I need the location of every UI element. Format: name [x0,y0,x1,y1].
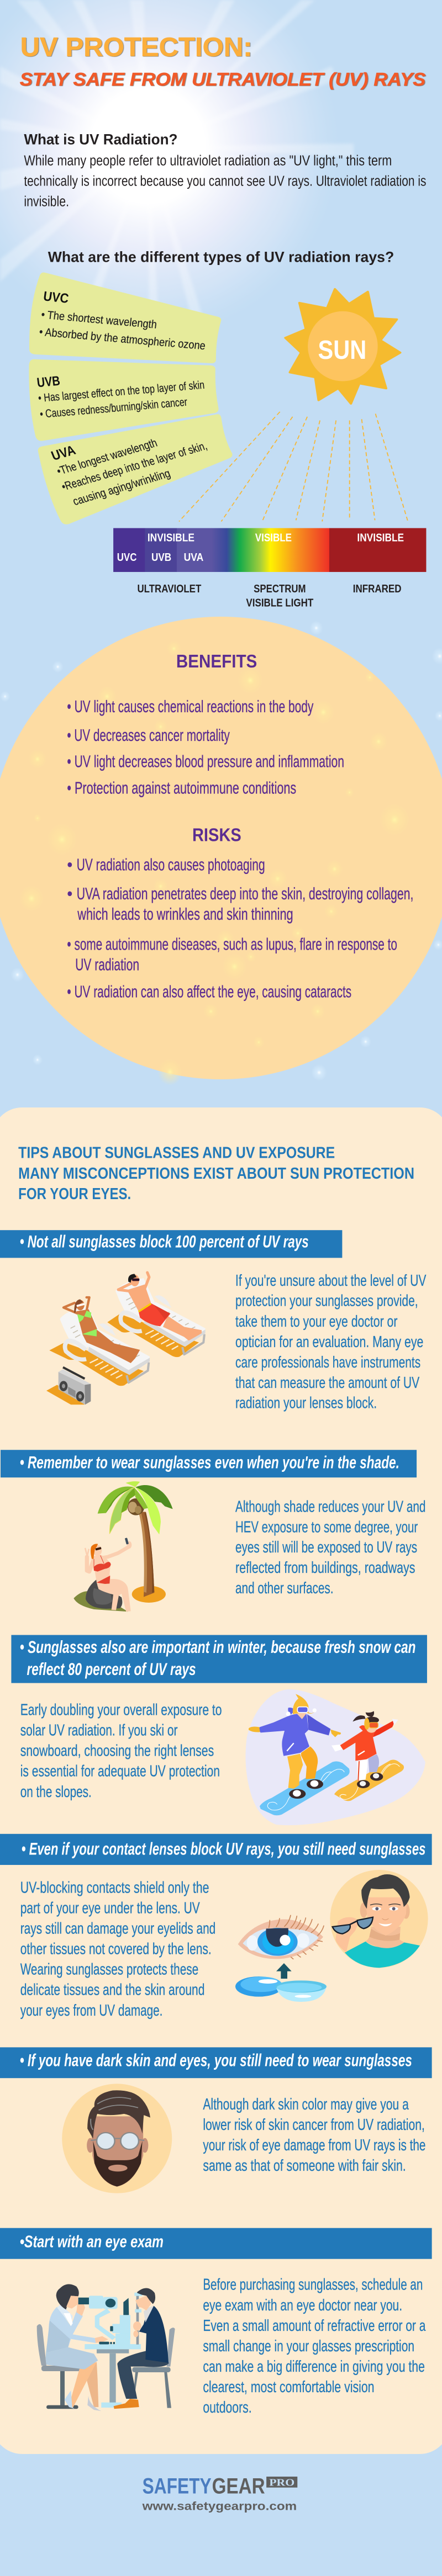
illustration: eye, contact lenses and man with sunglasses [235,1870,428,2002]
text: tip 4 body: delicate tissues and the skin around [20,1981,204,1999]
text: tip 5 body [203,2096,425,2175]
section: benefits and risks text [0,621,442,1085]
tip bar: winter: reflect 80 percent of UV rays [27,1660,196,1679]
chart: electromagnetic spectrum bar: UVB [151,550,171,564]
intro text block: What is UV Radiation? [24,131,177,148]
list: risks: UV radiation [75,956,139,974]
list: benefits [67,698,344,798]
chart: electromagnetic spectrum bar: VISIBLE [255,531,292,544]
tip bar: shade [1,1450,417,1477]
tip bar: not all sunglasses [0,1230,342,1258]
section: tips heading and tip 1 [0,1144,427,1412]
spectrum labels: ULTRAVIOLET [137,582,201,595]
panel: UVA [38,414,233,524]
tip bar: contact lenses [0,1834,432,1865]
background blob [245,1689,425,1825]
boarder 2 [332,1711,398,1788]
list: risks [67,856,413,1001]
list: risks: • [67,856,72,874]
sparkles over circle [19,641,410,1085]
list: benefits: • Protection against autoimmune conditions [67,780,296,798]
panel: UVB [29,359,219,441]
rock [86,1579,122,1609]
man sunbathing [118,1273,202,1340]
text: tip 1 body [235,1271,427,1412]
panel: UVB: • Has largest effect on the top layer of skin [38,378,205,405]
spectrum labels: VISIBLE LIGHT [246,596,313,609]
logo: Safety Gear Pro: GEAR [212,2473,265,2498]
logo: Safety Gear Pro: PRO [269,2477,294,2488]
heading: tips [18,1144,414,1202]
chart: electromagnetic spectrum bar [113,528,426,572]
towel slat gaps [90,1331,178,1378]
section: UV ray types [29,249,426,609]
title: UV PROTECTION: [20,32,252,62]
towels [46,1314,199,1404]
illustration: woman under palm tree [73,1481,173,1612]
icon: sun [285,289,400,404]
list: risks: which leads to wrinkles and skin thinning [77,905,293,924]
text: tip 3 body [20,1701,222,1800]
icon: sun: SUN [318,335,366,364]
panel: UVB: UVB [36,374,61,390]
text: tip 3 body: solar UV radiation. If you ski or [20,1721,177,1739]
panel: UVC: • Absorbed by the atmospheric ozone [39,325,206,352]
heading: tips: FOR YOUR EYES. [18,1185,131,1202]
illustration: bearded man with aviators [62,2084,172,2193]
panel: UVC [29,272,221,363]
text: tip 2 body: and other surfaces. [235,1579,334,1597]
text: tip 4 body: rays still can damage your eyelids and [20,1920,215,1937]
patient [114,2288,169,2409]
panel: benefits and risks circle [0,617,442,1079]
panel: sunglasses tips background [0,1107,442,2454]
list: risks: UV radiation also causes photoaging [77,856,265,874]
chart: electromagnetic spectrum bar: UVA [184,550,203,564]
illustration: sunbathers on loungers [46,1273,206,1404]
woman [85,1538,131,1612]
text: tip 4 body [20,1879,215,2019]
text: tip 6 body [203,2276,426,2416]
panel: UVB: • Causes redness/burning/skin cancer [39,395,188,421]
tip bar: eye exam: •Start with an eye exam [20,2233,164,2251]
heading: types of UV rays: What are the different types of UV radiation rays? [48,249,394,266]
contact lenses [235,1976,327,2002]
boards [260,1761,350,1815]
eye [238,1915,324,1959]
boarder 1 [249,1694,341,1799]
illustration: eye exam [37,2284,175,2411]
text: tip 3 body: is essential for adequate UV protection [20,1763,220,1780]
chart: electromagnetic spectrum bar: UVC [117,550,136,564]
doctor [46,2284,108,2411]
panel: UVA: •Reaches deep into the layer of skin, [60,439,209,493]
arrow up to eye [276,1963,292,1979]
title [20,32,426,90]
panel: UVC: UVC [43,289,70,306]
doctor's chair [37,2324,82,2409]
panel: UVA: causing aging/wrinkling [71,467,172,508]
woman's lounger [60,1306,150,1382]
heading: risks: RISKS [192,825,241,845]
tip bar: dark skin [0,2047,432,2078]
text: tip 3 body: on the slopes. [20,1783,92,1800]
man portrait [330,1870,428,1968]
logo: Safety Gear Pro [142,2473,297,2513]
rays from sun to spectrum [179,412,408,522]
intro text block: invisible. [24,194,69,209]
panel: UVA: •The longest wavelength [55,436,159,478]
heading: benefits: BENEFITS [176,651,257,671]
man's lounger [115,1278,206,1354]
text: tip 3 body: Early doubling your overall exposure to [20,1701,222,1719]
woman sunbathing [64,1297,140,1363]
section: tip 6 and footer [0,2228,432,2513]
text: tip 4 body: Wearing sunglasses protects these [20,1961,198,1978]
text: tip 3 body: snowboard, choosing the right lenses [20,1742,214,1759]
list: benefits: • UV light decreases blood pressure and inflammation [67,752,344,771]
tip bar: winter [11,1635,427,1683]
tip bar: eye exam [0,2228,432,2259]
spectrum labels: INFRARED [353,582,402,595]
sparkles over sky [0,621,442,1081]
slit lamp [78,2293,142,2408]
text: tip 4 body: part of your eye under the lens. UV [20,1899,200,1917]
illustration: snowboarders [245,1689,425,1825]
spectrum labels: SPECTRUM [254,582,306,595]
list: benefits: • UV light causes chemical reactions in the body [67,698,314,716]
text: tip 4 body: UV-blocking contacts shield only the [20,1879,209,1896]
list: benefits: • UV decreases cancer mortality [67,727,230,745]
text: tip 6 body: outdoors. [203,2398,252,2416]
boombox [59,1367,91,1404]
panel: UVA: UVA [49,443,78,464]
list: risks: • UV radiation can also affect the eye, causing cataracts [67,983,351,1001]
panel: UVC: • The shortest wavelength [40,308,157,331]
logo: Safety Gear Pro: SAFETY [143,2473,212,2498]
logo: Safety Gear Pro: www.safetygearpro.com [142,2500,297,2513]
intro text block [24,131,426,209]
text: tip 4 body: your eyes from UV damage. [20,2002,162,2019]
chart: electromagnetic spectrum bar: INVISIBLE [357,531,404,544]
list: risks: • [67,885,72,903]
text: tip 2 body [235,1498,425,1597]
text: tip 4 body: other tissues not covered by the lens. [20,1940,212,1958]
section: tips 4 and 5 [0,1834,432,2193]
spectrum labels [137,582,402,609]
section: tips 2 and 3 [1,1450,427,1800]
patient's chair [132,2328,175,2408]
chart: electromagnetic spectrum bar: INVISIBLE [148,531,194,544]
section: header and intro [20,32,426,209]
